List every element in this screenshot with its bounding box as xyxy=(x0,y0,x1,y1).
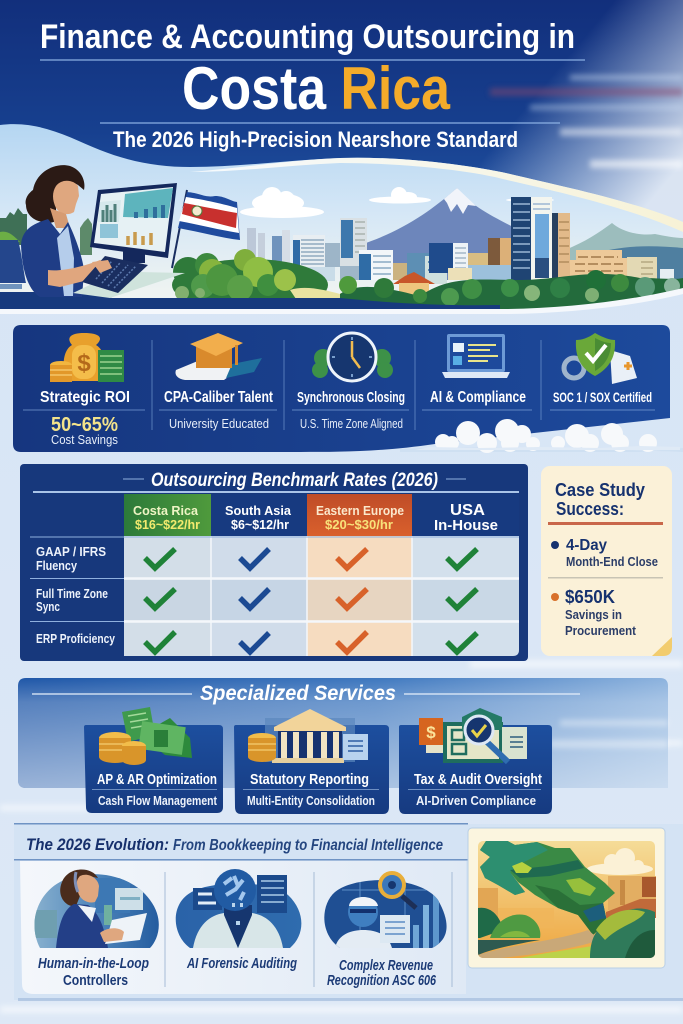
icon: laptop xyxy=(442,334,510,378)
road xyxy=(478,930,600,958)
buildings xyxy=(478,876,656,928)
benefit: CPA talent: CPA-Caliber Talent xyxy=(164,389,273,406)
illustration: revenue recognition xyxy=(320,868,450,948)
benefit: strategic ROI xyxy=(40,333,130,447)
navy band xyxy=(0,292,500,309)
column headers: $20~$30/hr xyxy=(325,517,393,532)
evolution cards: AI Forensic Auditing xyxy=(186,955,297,972)
benefit: synchronous closing: Synchronous Closing xyxy=(297,389,405,406)
column headers: In-House xyxy=(434,517,498,534)
icon: magnifier and documents xyxy=(419,708,527,763)
panel: case study: 4-Day xyxy=(566,537,607,554)
panel: case study: Month-End Close xyxy=(566,554,658,569)
benefit: CPA talent: University Educated xyxy=(169,416,269,431)
keyboard xyxy=(82,256,148,293)
benefit: AI and compliance: AI & Compliance xyxy=(430,389,526,406)
service card: tax and audit xyxy=(399,708,552,814)
woman xyxy=(21,165,112,297)
column headers: Costa Rica xyxy=(133,503,199,518)
trees left of centre xyxy=(172,249,340,298)
left trees xyxy=(478,908,503,938)
service card: AP and AR xyxy=(84,707,223,813)
illustration: human controller xyxy=(28,868,162,948)
check marks xyxy=(145,549,477,652)
column headers: $16~$22/hr xyxy=(135,517,200,532)
column headers: Eastern Europe xyxy=(316,503,404,518)
illustration: AI forensic xyxy=(170,868,305,948)
panel: case study: Case Study xyxy=(555,480,645,500)
small orange house xyxy=(393,272,435,284)
column headers xyxy=(124,494,519,536)
background streaks xyxy=(0,660,683,1013)
evolution cards: Complex Revenue xyxy=(339,958,433,974)
service card: statutory reporting: Statutory Reporting xyxy=(250,772,369,788)
hand xyxy=(92,260,112,273)
desk xyxy=(73,272,185,298)
panel: case study: Savings in xyxy=(565,607,622,622)
panel: case study: Procurement xyxy=(565,623,637,638)
title: Costa Rica xyxy=(182,55,451,122)
panel: case study: Success: xyxy=(556,499,624,519)
Costa Rica flag xyxy=(172,190,240,268)
row labels: Full Time Zone xyxy=(36,587,108,601)
benefit: SOC certified xyxy=(553,333,652,405)
panel: case study xyxy=(541,466,672,656)
column headers: USA xyxy=(450,502,485,519)
table heading: Outsourcing Benchmark Rates (2026) xyxy=(151,470,438,491)
white lower arc xyxy=(0,288,683,314)
main buildings xyxy=(340,197,674,284)
title: Finance & Accounting Outsourcing in xyxy=(40,18,575,56)
row labels: Fluency xyxy=(36,559,77,573)
left foliage xyxy=(0,208,92,255)
cream arc xyxy=(190,158,683,232)
far towers xyxy=(247,228,256,258)
clouds xyxy=(400,419,683,453)
service card: AP and AR: Cash Flow Management xyxy=(98,793,218,808)
sky and wave xyxy=(0,124,683,311)
benefit: synchronous closing xyxy=(297,333,405,431)
service card: AP and AR: AP & AR Optimization xyxy=(97,772,217,788)
evolution cards: Recognition ASC 606 xyxy=(327,973,437,989)
icon: magnifier and documents: $ xyxy=(426,723,436,742)
benefit: AI and compliance xyxy=(430,334,526,406)
icon: shield with gear and papers xyxy=(564,333,637,384)
dividers xyxy=(152,340,541,430)
map of Costa Rica xyxy=(480,838,615,935)
row labels: ERP Proficiency xyxy=(36,632,115,646)
column headers: South Asia xyxy=(225,503,292,518)
title xyxy=(40,18,585,152)
benefit: strategic ROI: Strategic ROI xyxy=(40,389,130,406)
heading: Specialized Services xyxy=(200,682,396,705)
evolution subheading: From Bookkeeping to Financial Intelligence xyxy=(173,837,443,854)
hero illustration xyxy=(0,124,683,314)
table cells xyxy=(30,536,519,656)
service card: tax and audit: AI-Driven Compliance xyxy=(416,793,536,808)
right trees xyxy=(590,908,655,958)
panel: case study: $650K xyxy=(565,587,615,607)
evolution cards xyxy=(20,861,466,994)
benefit: CPA talent xyxy=(164,333,273,431)
benefit: strategic ROI: 50~65% xyxy=(51,414,118,436)
right mountain xyxy=(570,223,683,260)
icon: clock with leaves xyxy=(312,333,393,381)
chair xyxy=(0,240,26,283)
header banner xyxy=(0,0,683,240)
column headers: $6~$12/hr xyxy=(231,517,289,532)
icon: graduation cap and books xyxy=(175,333,262,380)
benefit: synchronous closing: U.S. Time Zone Aligned xyxy=(300,417,403,431)
service card: tax and audit: Tax & Audit Oversight xyxy=(414,772,542,788)
row labels xyxy=(36,545,115,646)
service card: statutory reporting: Multi-Entity Consolidation xyxy=(247,793,375,808)
service card: statutory reporting xyxy=(234,709,389,814)
panel: benchmark table xyxy=(20,464,528,661)
title: The 2026 High-Precision Nearshore Standard xyxy=(113,127,518,152)
row labels: Sync xyxy=(36,600,60,614)
panel: 2026 evolution xyxy=(14,823,683,1001)
clouds xyxy=(240,187,554,218)
icon: money bag: $ xyxy=(77,350,91,377)
icon: bank building xyxy=(248,709,368,763)
evolution cards: Human-in-the-Loop xyxy=(38,955,149,972)
benefit: strategic ROI: Cost Savings xyxy=(51,432,118,447)
cloud xyxy=(587,848,653,875)
evolution cards: Controllers xyxy=(63,972,128,989)
icon: cash and coins xyxy=(99,707,192,765)
evolution heading: The 2026 Evolution: xyxy=(26,836,169,854)
panel: key benefits xyxy=(13,325,683,453)
volcano xyxy=(360,188,520,280)
panel: specialized services xyxy=(18,678,668,814)
ground xyxy=(340,293,342,294)
row labels: GAAP / IFRS xyxy=(36,545,106,559)
monitor xyxy=(90,183,177,258)
monitor stand xyxy=(123,250,145,263)
trees right of centre xyxy=(339,270,683,312)
photo: Costa Rica map landscape xyxy=(468,828,665,968)
